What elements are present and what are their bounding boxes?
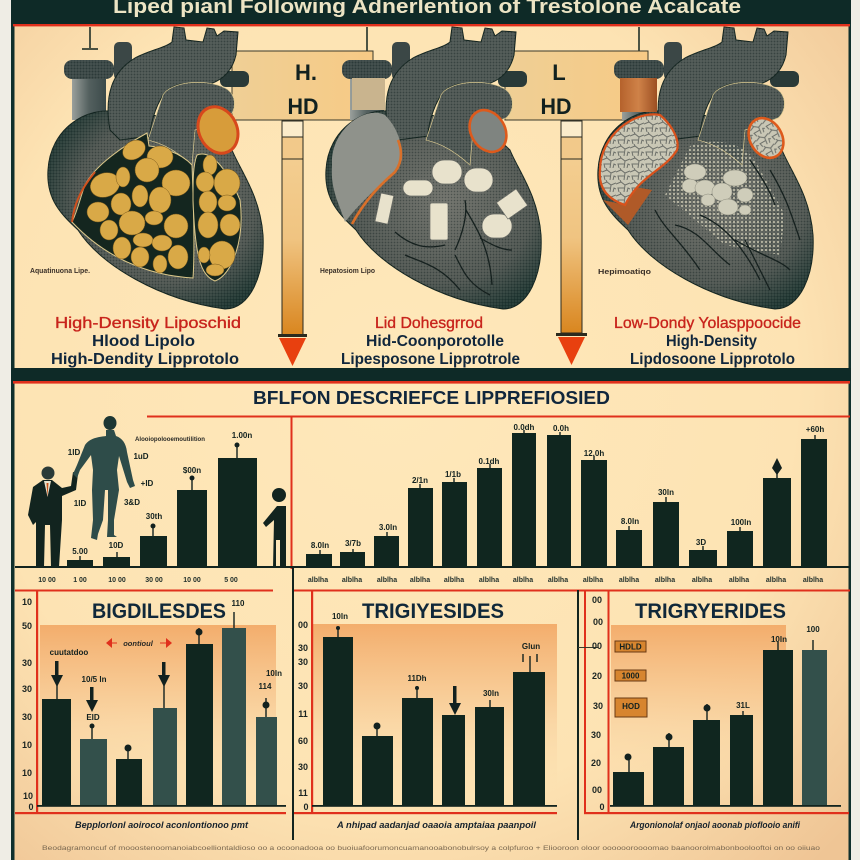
value markers: 10ln (332, 612, 348, 621)
label block: middle heart: Hid-Coonporotolle (366, 333, 504, 350)
value markers: 30ln (483, 689, 499, 698)
bar chart: wide lipid series: alblha (444, 577, 464, 584)
panel: BIGDILESDES chart (15, 590, 286, 830)
bar chart: body composition: 5.00 (72, 547, 88, 556)
bar chart: wide lipid series: alblha (655, 577, 675, 584)
icon: heart with fatty plaque (598, 27, 813, 309)
bar chart: wide lipid series: alblha (410, 577, 430, 584)
connector: L HD box: HD (540, 94, 572, 119)
bar chart: body composition: +ID (141, 479, 154, 488)
bar chart: wide lipid series: 1/1b (445, 470, 461, 479)
bar chart: wide lipid series: 0.0h (553, 424, 569, 433)
y axis: 11 (298, 709, 308, 719)
y axis: 00 (298, 620, 308, 630)
orange tags: HOD (622, 702, 640, 711)
bars (42, 628, 277, 805)
bar chart: wide lipid series: 3/7b (345, 539, 361, 548)
y axis: 0 (303, 802, 309, 812)
y axis: 0 (599, 802, 605, 812)
connector: H. HD box (82, 27, 373, 120)
bar chart: wide lipid series: alblha (692, 577, 712, 584)
bar chart: wide lipid series: alblha (766, 577, 786, 584)
y axis: 0 (28, 802, 34, 812)
bar chart: wide lipid series: alblha (619, 577, 639, 584)
y axis: 10 (22, 597, 32, 607)
y axis: 20 (591, 758, 601, 768)
label block: left heart (51, 315, 241, 368)
bar chart: wide lipid series: alblha (342, 577, 362, 584)
orange tags: HDLD (619, 642, 642, 652)
y axis: 30 (22, 684, 32, 694)
bar chart: wide lipid series: alblha (729, 577, 749, 584)
bar chart: body composition: 10 00 (38, 577, 56, 584)
bar chart: wide lipid series: 3D (696, 538, 706, 547)
range annotation: oontioul (123, 639, 154, 648)
bar chart: wide lipid series: alblha (479, 577, 499, 584)
bar chart: wide lipid series: 8.0ln (311, 541, 329, 550)
y axis: 00 (593, 617, 603, 627)
value markers: 10ln (771, 635, 787, 644)
y axis: 30 (593, 701, 603, 711)
bar chart: body composition: 30th (146, 512, 162, 521)
y axis: 30 (298, 643, 308, 653)
arrow: first down arrow (278, 121, 307, 366)
y axis: 00 (592, 641, 602, 651)
section heading: BFLFON DESCRIEFCE LIPPREFIOSIED (253, 388, 610, 408)
label block: right heart: High-Density (666, 333, 757, 350)
bar chart: wide lipid series: 3.0ln (379, 523, 397, 532)
label block: left heart: High-Density Liposchid (55, 315, 241, 332)
value markers (332, 612, 540, 736)
value markers (624, 625, 820, 772)
value markers: 11Dh (407, 674, 427, 683)
bar chart: wide lipid series: 8.0ln (621, 517, 639, 526)
panel: TRIGIYESIDES chart (294, 590, 557, 830)
value markers: Glun (522, 642, 540, 651)
caption: Bepplorlonl aoirocol aconlontionoo pmt (75, 820, 249, 830)
bar chart: wide lipid series: +60h (806, 425, 824, 434)
bar chart: body composition: 3&D (124, 498, 140, 507)
bar chart: body composition: 10 00 (108, 577, 126, 584)
fine print footer: Beodagramoncuf of mooostenoomanoiabcoelliontaldioso oo a ocoonadooa oo buoiuafoorumoncuamanooabonobulrsoy a colpfuroo + Eliooroon oloor ooooooroooomao baanoorolmabonboolooftoi on oo oiiuao (42, 845, 820, 852)
y axis (298, 620, 309, 812)
connector: L HD box: L (552, 60, 566, 85)
icon: heart with tablets (326, 27, 541, 309)
y axis: 30 (298, 657, 308, 667)
mid band divider (11, 368, 851, 381)
label block: left heart: High-Dendity Lipprotolo (51, 351, 239, 368)
y axis (578, 595, 605, 812)
bar chart: body composition: 1.00n (232, 431, 252, 440)
y axis: 30 (22, 712, 32, 722)
connector: H. HD box: H. (295, 60, 317, 85)
bar chart: wide lipid series: 2/1n (412, 476, 428, 485)
y axis (22, 597, 34, 812)
value markers: 10/5 ln (82, 675, 107, 684)
bar chart: body composition: 5 00 (224, 577, 238, 584)
bar chart: wide lipid series: 100ln (731, 518, 751, 527)
value markers: EID (86, 713, 100, 722)
bar chart: body composition: $00n (183, 466, 201, 475)
label block: right heart: Low-Dondy Yolasppoocide (614, 315, 801, 332)
label block: middle heart: Lipesposone Lipprotrole (341, 351, 520, 368)
caption: Argonionolaf onjaol aoonab pioflooio anifi (629, 820, 800, 830)
label block: middle heart: Lid Dohesgrrod (375, 315, 483, 332)
value markers: cuutatdoo (50, 648, 88, 657)
bar chart: body composition: 1ID (68, 448, 80, 457)
value markers: 31L (736, 701, 750, 710)
y axis: 30 (298, 681, 308, 691)
chart title: BIGDILESDES (92, 600, 226, 623)
y axis: 60 (298, 736, 308, 746)
y axis: 30 (22, 658, 32, 668)
bar chart: wide lipid series (306, 423, 827, 584)
icon: man in suit (28, 466, 78, 567)
bar chart: wide lipid series: alblha (548, 577, 568, 584)
value markers (50, 599, 282, 759)
chart title: TRIGIYESIDES (362, 600, 504, 623)
caption: A nhipad aadanjad oaaoia amptaiaa paanpoil (336, 820, 537, 830)
bar chart: wide lipid series: 0.1dh (479, 457, 500, 466)
small caption: heart 1: Aquatinuona Lipe. (30, 268, 90, 275)
bar chart: wide lipid series: alblha (513, 577, 533, 584)
y axis: 11 (298, 788, 308, 798)
y axis: 50 (22, 621, 32, 631)
label block: right heart (614, 315, 801, 368)
y axis: 30 (591, 730, 601, 740)
range annotation (106, 638, 172, 648)
bar chart: body composition: 1uD (133, 452, 149, 461)
y axis: 20 (592, 671, 602, 681)
bar chart: wide lipid series: alblha (377, 577, 397, 584)
y axis: 10 (22, 740, 32, 750)
value markers: 10ln (266, 669, 282, 678)
y axis: 10 (23, 791, 33, 801)
bar chart: body composition: Alooiopolooemoutilition (135, 437, 205, 443)
orange tags: 1000 (622, 672, 640, 680)
bar chart: body composition: 30 00 (145, 577, 163, 584)
bar chart: wide lipid series: alblha (583, 577, 603, 584)
icon: muscular figure (73, 416, 135, 540)
icon: stick figure (263, 488, 286, 568)
bar chart: wide lipid series: 12.0h (584, 449, 604, 458)
label block: right heart: Lipdosoone Lipprotolo (630, 351, 795, 368)
bar chart: body composition (38, 431, 257, 584)
y axis: 00 (592, 595, 602, 605)
label block: left heart: Hlood Lipolo (92, 333, 195, 350)
bar chart: wide lipid series: alblha (308, 577, 328, 584)
value markers: 114 (259, 682, 272, 691)
connector: H. HD box: HD (288, 94, 318, 119)
value markers: 110 (232, 599, 245, 608)
y axis: 00 (592, 785, 602, 795)
icon: heart with lipid deposits (48, 27, 263, 309)
bars (323, 637, 545, 805)
small caption: heart 3: Hepimoatiqo (598, 269, 651, 276)
arrow: second down arrow (556, 121, 587, 365)
bar chart: wide lipid series: alblha (803, 577, 823, 584)
connector: L HD box (505, 27, 648, 120)
bar chart: body composition: 1ID (74, 499, 86, 508)
orange tags (615, 641, 647, 717)
bar chart: body composition: 1 00 (73, 577, 87, 584)
chart title: TRIGRYERIDES (635, 600, 786, 623)
label block: middle heart (341, 315, 520, 368)
bars (613, 650, 827, 805)
y axis: 10 (22, 768, 32, 778)
bar chart: body composition: 10D (109, 541, 124, 550)
small caption: heart 2: Hepatosiom Lipo (320, 268, 375, 275)
bar chart: body composition: 10 00 (183, 577, 201, 584)
value markers: 100 (806, 625, 820, 634)
title band (11, 0, 851, 26)
bar chart: wide lipid series: 0.0dh (514, 423, 535, 432)
panel: TRIGRYERIDES chart (578, 590, 849, 830)
y axis: 30 (298, 762, 308, 772)
bar chart: wide lipid series: 30ln (658, 488, 674, 497)
